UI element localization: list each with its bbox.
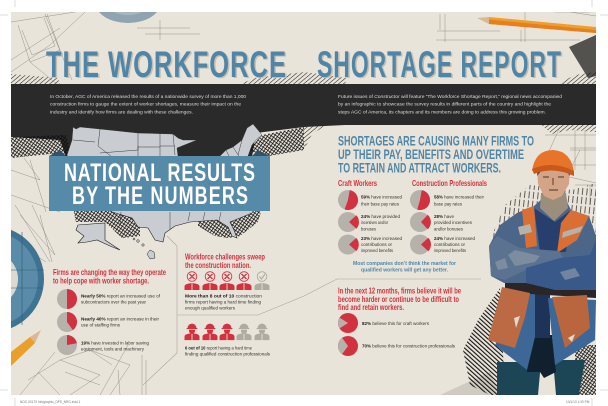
stat professionals 28 [434,214,473,231]
lower vest left [488,287,530,348]
vest highlights [514,316,575,342]
pie 70 percent [338,336,358,356]
Michigan lake gap [187,141,203,156]
Alaska [76,223,120,250]
pie craft 23 [338,234,359,254]
stat: 6 of 10 [185,346,271,357]
stat 40 percent: Nearly 40% report an increase in their [81,316,159,322]
Hawaii [133,238,155,259]
stat professionals 28: provided incentives [434,220,473,225]
intro text right: steps AGC of America, its chapters and its members are doing to address this growing problem. [338,110,546,116]
construction worker [488,150,596,395]
stat craft 24: 24% have provided [361,214,400,219]
panel: firms changing [53,267,166,355]
hair [537,167,570,176]
heading: next 12 months: become harder or continue to be difficult to [338,294,459,304]
subheading: construction professionals: Construction Professionals [412,178,487,188]
main title: THE WORKFORCE [46,43,286,85]
main title [46,51,562,78]
callout: market outlook: Most companies don’t think the market for [353,261,456,267]
dark band [11,84,596,157]
icons: 6 of 10 workers [184,324,270,340]
heading: next 12 months: find and retain workers. [338,302,404,312]
brush texture above band [11,72,596,84]
stat craft 59: their base pay rates [361,202,400,206]
hard hat [532,150,574,176]
pie professionals 58 [410,190,430,210]
heading: workforce challenges: Workforce challenges sweep [185,252,265,262]
brush texture around map [11,124,596,238]
stat 50 percent: subcontractors over the past year [81,300,146,305]
heading: shortages: TO RETAIN AND ATTRACT WORKERS. [338,160,501,176]
stat professionals 58: 58% have increased their [434,194,484,200]
jacket torso [489,198,596,290]
pie craft 59 [338,190,358,210]
stat: 8 of 10: enough qualified workers [185,306,236,311]
jeans left leg [497,362,541,395]
file slug left: NOC-00170 Infographic_DPS_NRG.indd 1 [20,400,81,404]
pie professionals 28 [410,212,431,232]
stat: 8 of 10: firms report having a hard time finding [185,300,261,305]
stat professionals 24: improved benefits [434,248,467,253]
heading: shortages [338,136,534,172]
jacket flap right [548,298,596,365]
heading: workforce challenges: the construction nation. [185,260,251,270]
stat professionals 28: and/or bonuses [434,226,464,231]
pie 19 percent [57,335,77,355]
crossed arms [489,236,566,280]
dark trousers centre [527,335,556,378]
protractor top [99,12,157,23]
heading: firms changing [53,269,166,285]
stat 82 percent: 82% believe this for craft workers [362,321,430,326]
right bottom hatch [575,345,596,395]
callout: market outlook [353,261,456,273]
stat: 8 of 10: More than 8 out of 10 construction [185,294,262,298]
heading: workforce challenges [185,254,265,268]
protractor left [11,230,44,328]
stat craft 24 [361,214,400,231]
stat craft 24: bonuses [361,226,377,231]
stat professionals 58 [434,194,484,206]
pencil top right [477,17,596,33]
stat: 6 of 10: 6 out of 10 report having a hard time [185,346,252,350]
stat 40 percent: use of staffing firms [81,323,121,328]
main title: THE WORKFORCE [48,44,287,86]
divider lines [143,236,481,385]
intro text left [50,94,246,116]
stat 19 percent [81,340,149,352]
main title: SHORTAGE REPORT [318,44,563,86]
panel: pay and benefits [338,132,534,273]
stat 50 percent [81,294,161,305]
US map [67,124,262,242]
stat craft 23: improved benefits [361,248,394,253]
turtleneck [540,193,568,221]
stat professionals 24: 24% have increased [434,236,475,241]
main title: SHORTAGE REPORT [317,43,561,85]
heading: next 12 months [338,286,461,312]
banner: NATIONAL RESULTS [64,158,255,187]
stat craft 23: 23% have increased [361,236,402,241]
heading: next 12 months: In the next 12 months, firms believe it will be [338,286,461,296]
ruler bottom right [440,372,500,395]
stat 19 percent: 19% have invested in labor saving [81,340,149,346]
pie 82 percent [338,313,358,333]
intro text right: by an infographic to showcase the survey results in different parts of the country and highlight the [338,102,551,108]
hatch behind worker [463,183,596,395]
heading: firms changing: to help cope with worker shortage. [53,275,149,285]
panel: next 12 months [338,286,461,356]
vest upper right [557,210,589,253]
jacket flap left [495,293,535,370]
eyes and mouth [543,177,564,190]
stat craft 23: contributions or [361,242,392,247]
intro text right [338,94,562,116]
stat craft 24: incentives and/or [361,220,388,225]
icons: 8 of 10 workers [184,272,270,290]
pie craft 24 [338,212,359,232]
stat 50 percent: Nearly 50% report an increased use of [81,294,161,298]
callout: market outlook: qualified workers will get any better. [361,267,449,273]
stat craft 59 [361,194,402,206]
intro text left: In October, AGC of America released the results of a nationwide survey of more than 1,000 [50,94,246,100]
set square top right [569,35,596,78]
stat 40 percent [81,316,159,328]
pencil bottom left [11,330,41,366]
stat professionals 24 [434,236,475,253]
pie 50 percent [57,289,77,309]
shirt collar area [534,208,571,252]
stat 19 percent: equipment, tools and machinery [81,347,145,352]
state lines [73,129,242,229]
pie professionals 24 [410,234,431,254]
stat 70 percent: 70% believe this for construction professionals [362,344,456,348]
belt shadow [505,281,596,298]
file slug right: 10/1/13 1:30 PM [566,400,590,404]
vest stripes [518,224,583,238]
intro text left: industry and identify how firms are dealing with these challenges. [50,110,193,116]
stat professionals 58: base pay rates [434,202,463,206]
banner: BY THE NUMBERS [72,181,248,210]
stat craft 59: 59% have increased [361,194,402,200]
face [537,168,570,200]
stat professionals 28: 28% have [434,214,454,219]
subheading: craft workers: Craft Workers [338,178,377,188]
stat craft 23 [361,236,402,253]
lower vest right [552,295,590,348]
vest upper left [522,206,537,248]
jeans right leg [553,360,585,395]
stat professionals 24: contributions or [434,242,465,247]
pie 40 percent [57,312,77,332]
navy shirt [533,292,550,338]
stat: 6 of 10: finding qualified construction professionals [185,352,271,357]
panel: workforce challenges [184,252,271,357]
intro text right: Future issues of Constructor will feature “The Workforce Shortage Report,” regional news accompanied [338,94,562,100]
stat: 8 of 10 [185,294,262,311]
banner [49,150,270,211]
intro text left: construction firms to gauge the extent of worker shortages, measure their impact on the [50,102,241,108]
heading: firms changing: Firms are changing the way they operate [53,267,166,277]
